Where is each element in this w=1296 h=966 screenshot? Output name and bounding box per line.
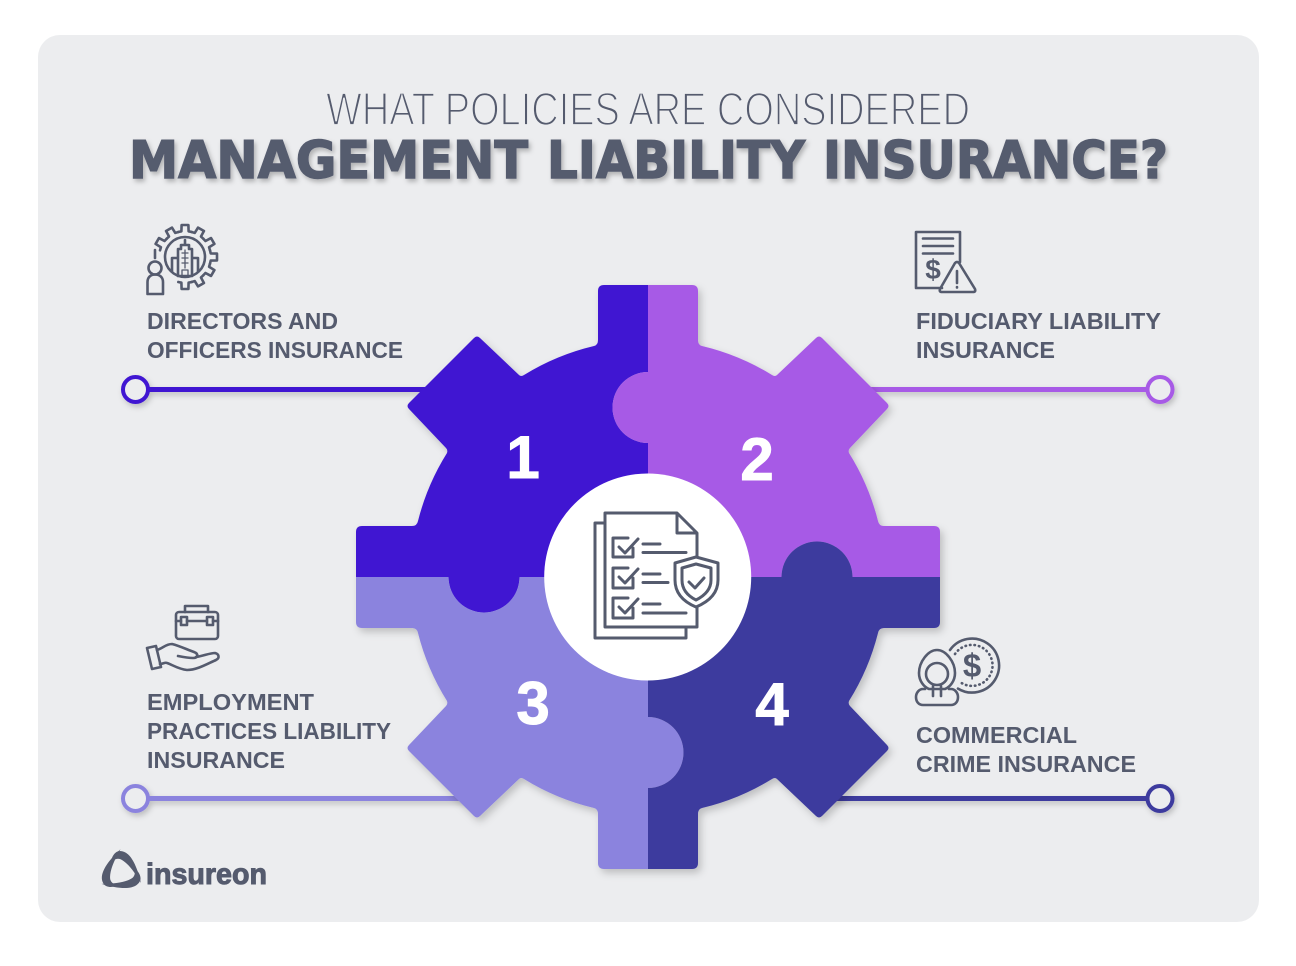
- label: commercial crime insurance: COMMERCIAL: [916, 722, 1077, 748]
- label: directors and officers insurance: [147, 308, 403, 363]
- word: insurance: INSURANCE?: [823, 131, 1168, 191]
- label: directors and officers insurance: OFFICERS INSURANCE: [147, 337, 403, 363]
- number 1: 1: [506, 424, 540, 491]
- label: directors and officers insurance: DIRECTORS AND: [147, 308, 338, 334]
- icon: gear with building and person: [148, 225, 217, 294]
- connector line 4: [830, 786, 1172, 811]
- number 2: 2: [740, 426, 774, 493]
- gear piece 2: [612, 285, 940, 577]
- gear piece 1: [356, 285, 648, 612]
- icon: thief and coin: $: [963, 647, 981, 684]
- icon: checklist with shield: [595, 513, 718, 638]
- icon: thief and coin: [916, 639, 999, 705]
- label: employment practices liability insurance: INSURANCE: [147, 747, 285, 773]
- connector line 3: [123, 786, 470, 811]
- icon: hand holding briefcase: [147, 606, 219, 670]
- label: commercial crime insurance: CRIME INSURANCE: [916, 751, 1136, 777]
- icon: document with dollar and warning: $: [925, 254, 941, 285]
- number 4: 4: [755, 671, 789, 738]
- number 3: 3: [516, 670, 550, 737]
- connector line 2: [860, 377, 1172, 402]
- block: directors and officers: [148, 225, 217, 294]
- title line 1: WHAT POLICIES ARE CONSIDERED: [326, 83, 970, 135]
- title: [129, 83, 1168, 191]
- label: employment practices liability insurance: [147, 689, 391, 773]
- connector line 1: [123, 377, 430, 402]
- label: employment practices liability insurance: EMPLOYMENT: [147, 689, 315, 715]
- title line 2: [129, 131, 1168, 191]
- word: management: MANAGEMENT: [129, 131, 528, 191]
- center white circle: [544, 474, 751, 680]
- gear puzzle: [356, 285, 940, 869]
- word: liability: LIABILITY: [547, 131, 806, 191]
- logo mark: [93, 849, 144, 900]
- label: fiduciary liability insurance: [916, 308, 1161, 363]
- logo: insureon: [93, 849, 267, 900]
- gear piece 4: [648, 542, 940, 869]
- label: fiduciary liability insurance: FIDUCIARY LIABILITY: [916, 308, 1161, 334]
- label: employment practices liability insurance: PRACTICES LIABILITY: [147, 718, 391, 744]
- gear piece 3: [356, 577, 684, 869]
- label: commercial crime insurance: [916, 722, 1136, 777]
- icon: document with dollar and warning: [916, 232, 975, 292]
- logo wordmark: insureon: [146, 858, 267, 891]
- label: fiduciary liability insurance: INSURANCE: [916, 337, 1055, 363]
